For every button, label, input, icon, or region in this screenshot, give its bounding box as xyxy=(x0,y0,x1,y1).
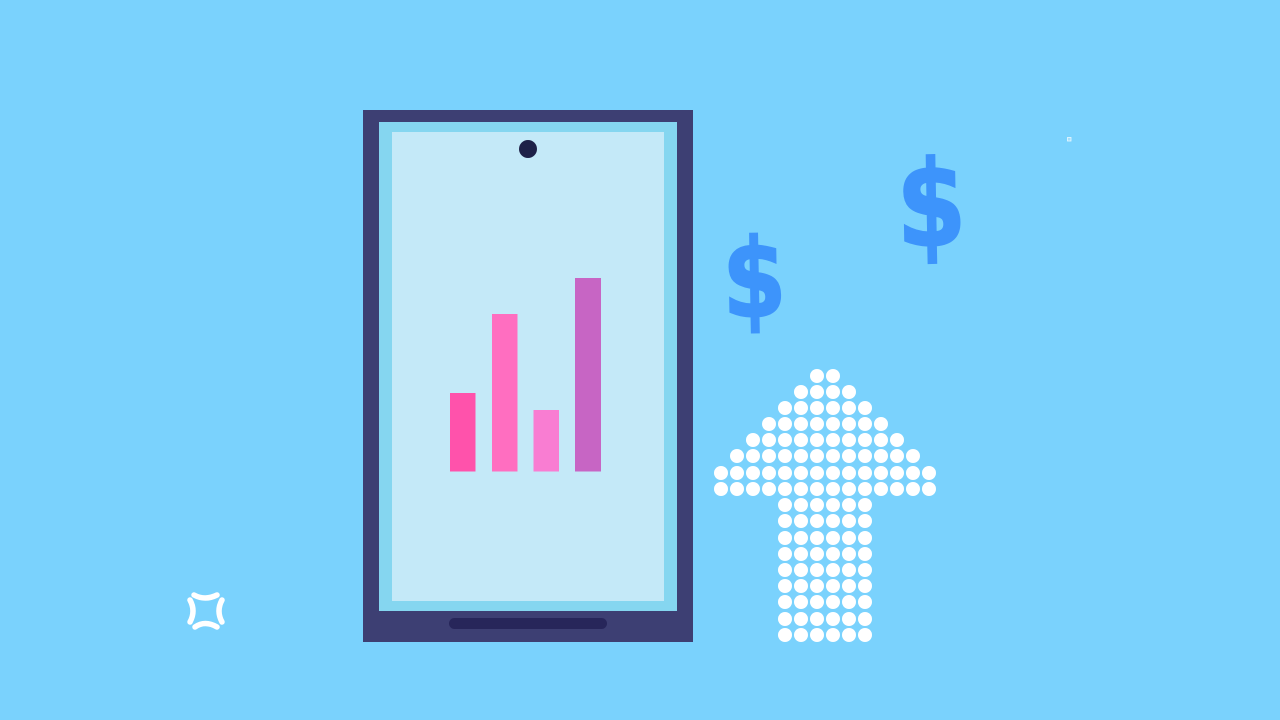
bar chart xyxy=(450,278,601,472)
tablet screen xyxy=(392,132,664,601)
tablet camera xyxy=(519,140,537,158)
tablet home bar xyxy=(449,618,607,629)
icon: anger mark xyxy=(190,595,222,627)
arrow: dotted up arrow xyxy=(714,369,936,642)
icon: dollar sign right: $ xyxy=(895,134,967,274)
tablet device xyxy=(363,110,693,642)
icon: dollar sign left: $ xyxy=(721,215,787,343)
icon: small square sparkle xyxy=(1068,138,1071,141)
